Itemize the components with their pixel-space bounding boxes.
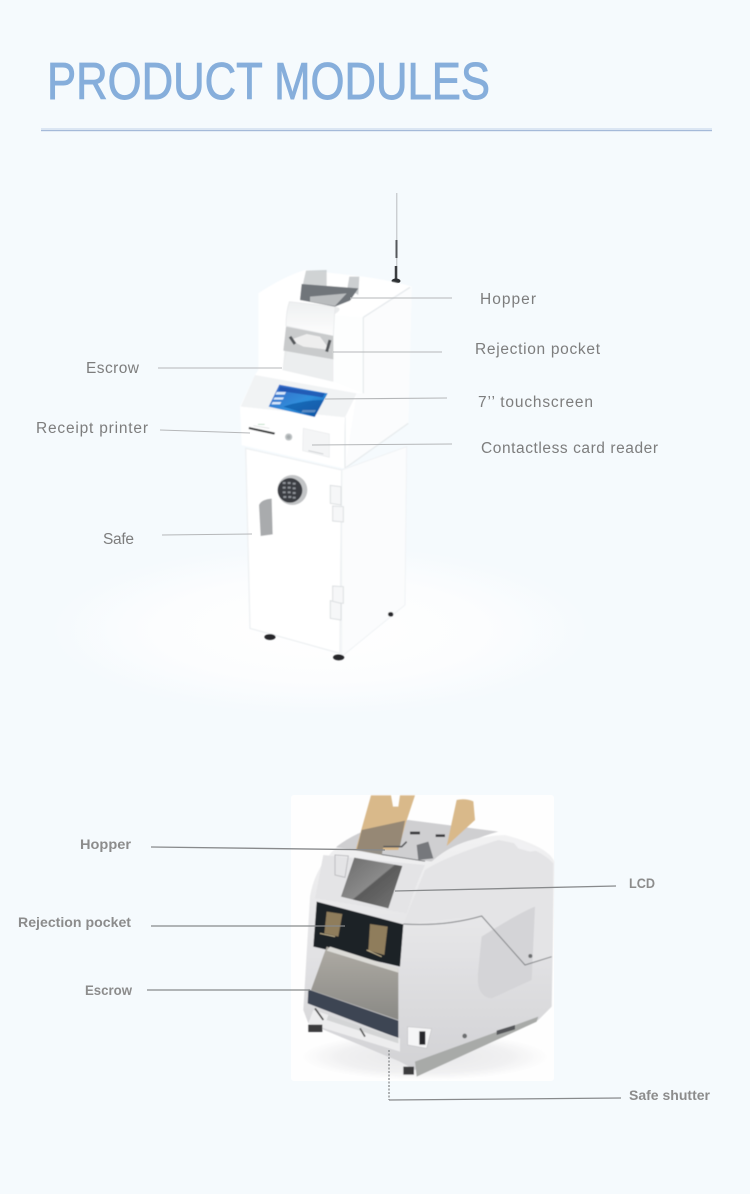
sorter labels: Rejection pocket [18,914,131,930]
touchscreen console [241,375,357,468]
smoked hopper plate [357,821,425,862]
sorter labels [18,836,711,1103]
sorter machine illustration [302,795,554,1080]
paper guides [356,795,475,850]
kiosk labels: Hopper [480,291,536,308]
kiosk labels: Escrow [86,360,140,377]
sorter photo panel [291,795,554,1081]
control panel [315,855,425,913]
sorter labels: Hopper [80,836,132,852]
top opening [335,820,498,862]
icon: antenna [392,193,400,284]
floor highlight [50,545,590,715]
touchscreen [269,385,328,417]
machine seam [403,916,552,965]
sorter labels: LCD [629,875,655,891]
side port [408,954,532,1048]
feet [264,612,393,660]
title: PRODUCT MODULES [47,53,490,111]
icon: keypad lock [277,475,307,505]
sorter labels: Escrow [85,982,132,998]
leader lines: kiosk [158,298,452,535]
kiosk labels: Safe [103,531,134,548]
feet [308,1025,414,1075]
contactless card reader [303,428,329,457]
kiosk labels: 7’’ touchscreen [478,394,593,411]
leader lines: sorter [147,847,621,1100]
hinges [330,485,343,620]
slot housing [283,302,340,382]
rejection pocket [313,902,403,967]
receipt printer [249,424,292,441]
kiosk labels: Receipt printer [36,420,148,437]
safe handle [259,499,273,536]
sorter labels: Safe shutter [629,1087,711,1103]
kiosk labels [36,291,658,548]
escrow [308,947,398,1038]
rejection pocket [283,327,333,359]
safe shutter [308,1008,400,1052]
escrow [283,352,333,382]
title rule [41,128,712,131]
floor shadow [302,1033,548,1080]
kiosk illustration [50,193,590,715]
LCD screen [341,858,402,908]
safe body [246,447,407,657]
machine body [303,835,554,1070]
hopper [300,270,359,307]
base plate [415,1017,538,1077]
kiosk labels: Rejection pocket [475,341,601,358]
kiosk upper body [240,270,412,468]
kiosk labels: Contactless card reader [481,440,658,457]
